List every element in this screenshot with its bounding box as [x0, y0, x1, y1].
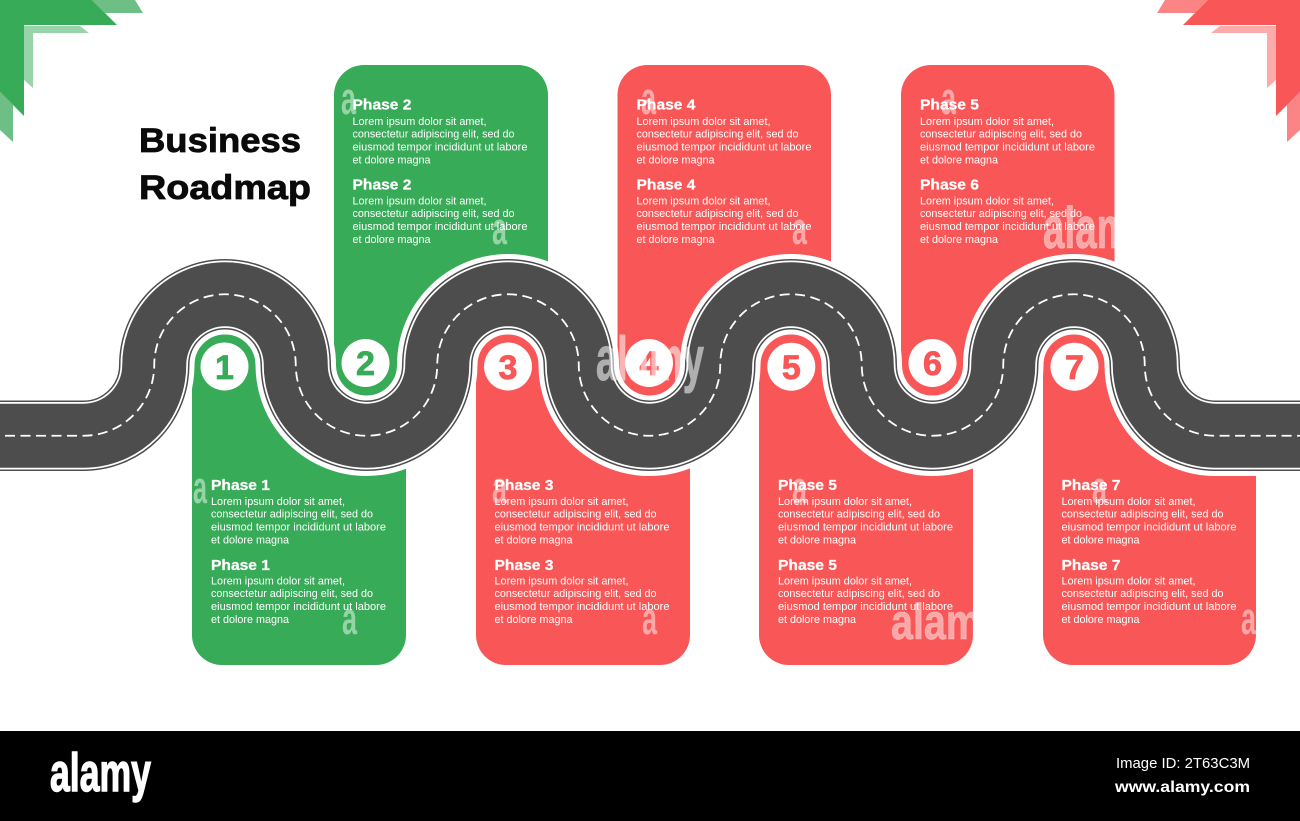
footer logo: alamy [50, 743, 151, 803]
text: phase 2: et dolore magna [352, 154, 431, 166]
text: phase 3: Lorem ipsum dolor sit amet, [494, 576, 628, 588]
text: phase 2: et dolore magna [352, 234, 431, 246]
text: phase 2: eiusmod tempor incididunt ut labore [352, 221, 528, 233]
text: phase 1: Phase 1 [211, 557, 270, 574]
stock watermarks: a [792, 462, 808, 513]
number 4 [625, 339, 673, 387]
text: phase 5 [778, 477, 953, 626]
text: phase 5: eiusmod tempor incididunt ut labore [778, 601, 953, 613]
corner decoration: green top left [0, 0, 143, 142]
text: phase 3: eiusmod tempor incididunt ut labore [494, 601, 670, 613]
text: phase 3: Lorem ipsum dolor sit amet, [494, 496, 628, 508]
footer url: www.alamy.com [1114, 779, 1250, 796]
text: phase 5 and 6 [920, 96, 1095, 246]
text: phase 5 and 6: consectetur adipiscing elit, sed do [920, 128, 1082, 140]
text: phase 5: Lorem ipsum dolor sit amet, [778, 576, 912, 588]
text: phase 1: consectetur adipiscing elit, sed do [211, 508, 373, 520]
panel: phase 3 [476, 332, 690, 665]
text: phase 1: Lorem ipsum dolor sit amet, [211, 496, 345, 508]
text: phase 1: consectetur adipiscing elit, sed do [211, 588, 373, 600]
text: phase 5 and 6: consectetur adipiscing elit, sed do [920, 208, 1082, 220]
text: phase 2: Phase 2 [352, 96, 412, 114]
text: phase 3: Phase 3 [494, 477, 554, 494]
number 7: 7 [1065, 349, 1084, 387]
text: phase 5: Lorem ipsum dolor sit amet, [778, 496, 912, 508]
text: phase 1: eiusmod tempor incididunt ut labore [211, 522, 386, 534]
number 3: 3 [499, 349, 517, 387]
stock watermarks: a [342, 593, 358, 644]
text: phase 3: consectetur adipiscing elit, sed do [494, 588, 656, 600]
text: phase 2: eiusmod tempor incididunt ut labore [352, 142, 528, 154]
text: phase 5 and 6: et dolore magna [920, 154, 999, 166]
stock watermarks: alam [891, 594, 981, 650]
text: phase 5 and 6: Phase 5 [920, 96, 979, 114]
text: phase 5 and 6: Phase 6 [920, 176, 979, 194]
number 5: 5 [782, 349, 801, 387]
text: phase 2: Lorem ipsum dolor sit amet, [352, 196, 486, 208]
text: phase 3: consectetur adipiscing elit, sed do [494, 508, 656, 520]
text: phase 2: consectetur adipiscing elit, sed do [352, 128, 514, 140]
panel: phase 6 [901, 65, 1114, 397]
text: phase 7: eiusmod tempor incididunt ut labore [1062, 522, 1237, 534]
text: phase 5 and 6: eiusmod tempor incididunt ut labore [920, 221, 1095, 233]
text: phase 7: consectetur adipiscing elit, sed do [1062, 588, 1224, 600]
text: phase 5: Phase 5 [778, 557, 837, 574]
text: phase 5 and 6: eiusmod tempor incididunt ut labore [920, 142, 1095, 154]
text: phase 2: consectetur adipiscing elit, sed do [352, 208, 514, 220]
stock watermarks: a [193, 462, 208, 513]
text: phase 4 [636, 96, 812, 246]
stock watermarks: a [641, 73, 657, 124]
number 2: 2 [356, 345, 375, 383]
panel: phase 7 [1043, 333, 1256, 665]
number 7 [1050, 343, 1098, 391]
title: Roadmap [139, 169, 311, 207]
text: phase 1 [211, 477, 386, 626]
corner decoration: red top right [1157, 0, 1300, 142]
stock watermarks: a [642, 593, 658, 644]
panel: phase 1 [192, 332, 406, 665]
text: phase 5 and 6: Lorem ipsum dolor sit amet, [920, 116, 1054, 128]
text: phase 4: eiusmod tempor incididunt ut labore [636, 221, 812, 233]
text: phase 7: consectetur adipiscing elit, sed do [1062, 508, 1224, 520]
text: phase 7: et dolore magna [1062, 534, 1140, 546]
text: phase 7: Phase 7 [1062, 557, 1120, 574]
stock watermarks: a [792, 203, 808, 254]
text: phase 4: consectetur adipiscing elit, sed do [636, 128, 798, 140]
text: phase 4: et dolore magna [636, 234, 715, 246]
text: phase 1: et dolore magna [211, 614, 290, 626]
text: phase 3 [494, 477, 670, 626]
number 6 [908, 339, 956, 387]
footer bar [0, 731, 1300, 821]
text: phase 5 and 6: et dolore magna [920, 234, 999, 246]
text: phase 5: et dolore magna [778, 534, 857, 546]
text: phase 4: Lorem ipsum dolor sit amet, [636, 196, 770, 208]
number 1 [200, 342, 248, 390]
stock watermarks: a [492, 462, 508, 513]
title: Business [139, 122, 301, 160]
text: phase 1: eiusmod tempor incididunt ut labore [211, 601, 386, 613]
number 6: 6 [923, 345, 942, 383]
text: phase 3: et dolore magna [494, 534, 573, 546]
text: phase 5: et dolore magna [778, 614, 857, 626]
text: phase 2: Phase 2 [352, 176, 412, 194]
stock watermarks: a [492, 203, 508, 254]
text: phase 2 [352, 96, 528, 246]
text: phase 1: Lorem ipsum dolor sit amet, [211, 576, 345, 588]
text: phase 7: et dolore magna [1062, 614, 1140, 626]
text: phase 4: Phase 4 [636, 96, 696, 114]
number 4: 4 [640, 345, 659, 383]
text: phase 7: Phase 7 [1062, 477, 1120, 494]
stock watermarks: alam [1043, 196, 1131, 261]
text: phase 4: Phase 4 [636, 176, 696, 194]
text: phase 5 and 6: Lorem ipsum dolor sit amet, [920, 196, 1054, 208]
text: phase 5: consectetur adipiscing elit, sed do [778, 508, 940, 520]
stock watermarks: alamy [596, 325, 704, 394]
number 1: 1 [215, 349, 234, 387]
stock watermarks: a [1092, 462, 1108, 513]
text: phase 3: eiusmod tempor incididunt ut labore [494, 522, 670, 534]
stock watermarks [193, 73, 1257, 650]
text: phase 5: eiusmod tempor incididunt ut labore [778, 522, 953, 534]
text: phase 2: Lorem ipsum dolor sit amet, [352, 116, 486, 128]
text: phase 3: Phase 3 [494, 557, 554, 574]
text: phase 7: Lorem ipsum dolor sit amet, [1062, 496, 1196, 508]
text: phase 7 [1062, 477, 1236, 626]
text: phase 7: Lorem ipsum dolor sit amet, [1062, 576, 1196, 588]
text: phase 3: et dolore magna [494, 614, 573, 626]
number 2 [342, 339, 390, 387]
number 3 [484, 342, 532, 390]
text: phase 4: Lorem ipsum dolor sit amet, [636, 116, 770, 128]
text: phase 4: eiusmod tempor incididunt ut labore [636, 142, 812, 154]
text: phase 4: et dolore magna [636, 154, 715, 166]
title [139, 122, 311, 207]
text: phase 4: consectetur adipiscing elit, sed do [636, 208, 798, 220]
text: phase 5: consectetur adipiscing elit, sed do [778, 588, 940, 600]
panel: phase 5 [759, 332, 973, 665]
text: phase 1: et dolore magna [211, 534, 290, 546]
stock watermarks: a [341, 73, 357, 124]
stock watermarks: a [941, 73, 957, 124]
text: phase 7: eiusmod tempor incididunt ut labore [1062, 601, 1237, 613]
panel: phase 4 [618, 65, 831, 397]
stock watermarks: a [1241, 593, 1257, 644]
winding road [0, 294, 1300, 436]
text: phase 1: Phase 1 [211, 477, 270, 494]
panel: phase 2 [334, 65, 548, 397]
number 5 [767, 343, 815, 391]
footer image id: Image ID: 2T63C3M [1116, 755, 1250, 772]
text: phase 5: Phase 5 [778, 477, 837, 494]
